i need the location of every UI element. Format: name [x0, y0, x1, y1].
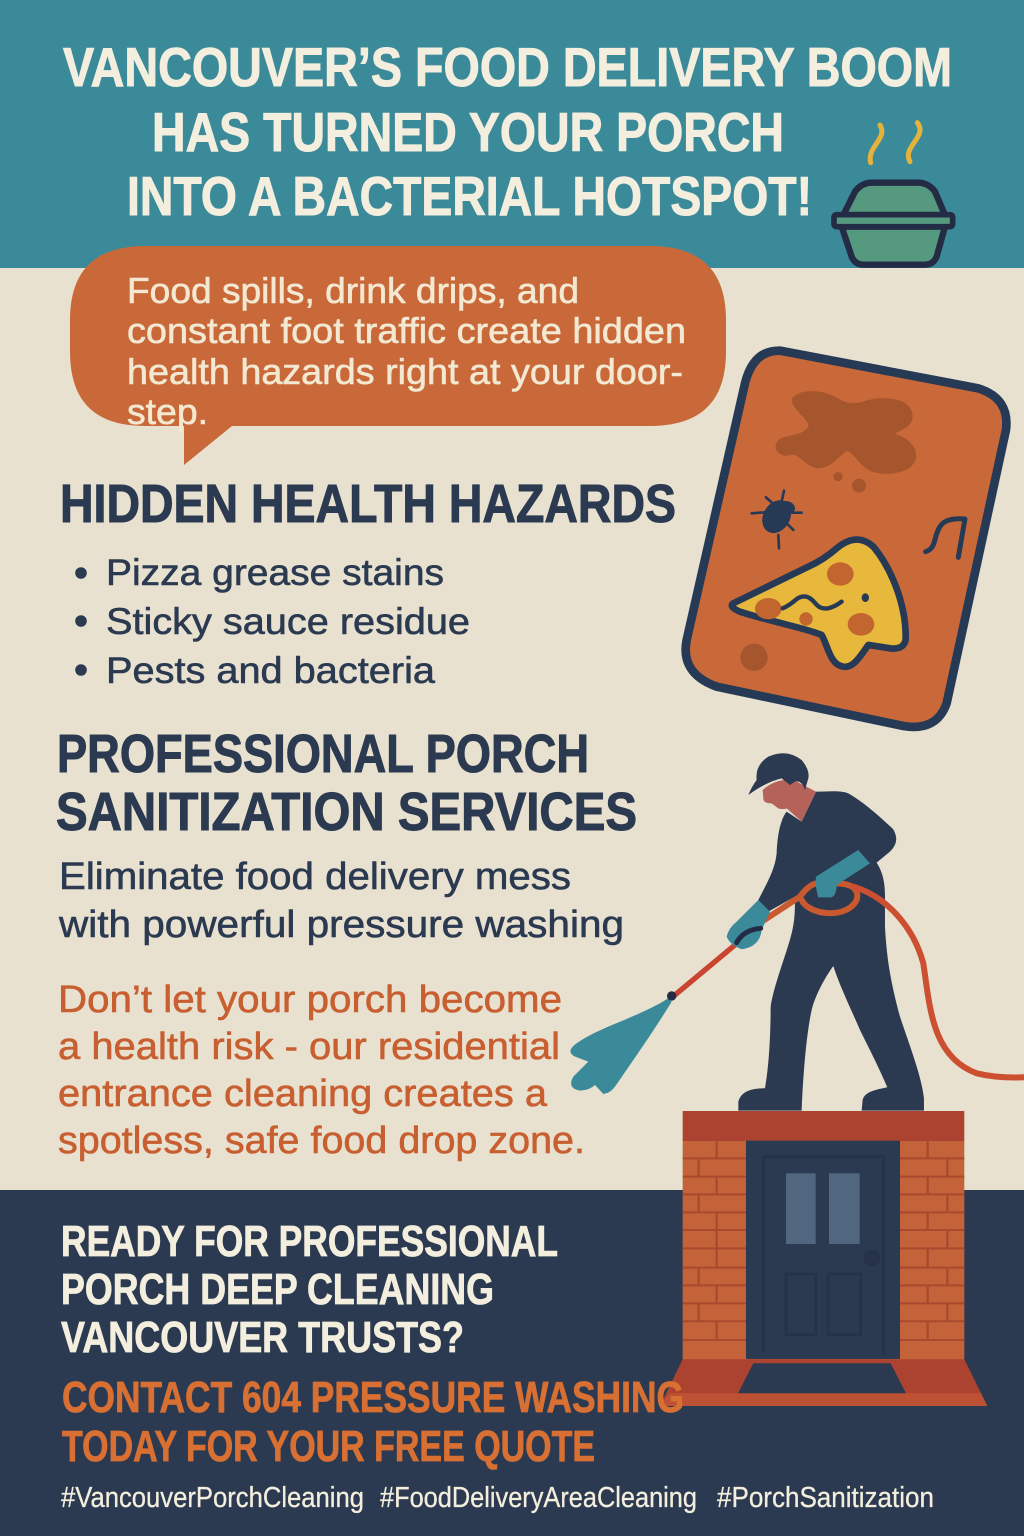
brick wall [683, 1140, 964, 1360]
speech bubble [70, 246, 726, 465]
wand grip and nozzle [737, 928, 761, 943]
call to action heading [61, 1217, 558, 1362]
hazards list: Pests and bacteria [106, 650, 435, 691]
mat [686, 351, 1006, 727]
call to action heading: VANCOUVER TRUSTS? [61, 1313, 464, 1362]
icon: takeout food box with steam [834, 123, 953, 265]
worker head [763, 780, 816, 822]
hashtags: #PorchSanitization [717, 1482, 934, 1514]
header band [0, 0, 1024, 268]
right glove [816, 850, 870, 897]
call to action heading: READY FOR PROFESSIONAL [61, 1217, 558, 1266]
bubble text [127, 270, 686, 432]
illustration: worker pressure washing [570, 753, 1024, 1111]
service description: Eliminate food delivery mess [59, 856, 571, 898]
floor lower band [660, 1393, 987, 1406]
grease stain [740, 393, 914, 671]
squiggle mark [926, 519, 965, 557]
illustration: brick porch with door [660, 1111, 987, 1406]
left glove [727, 900, 770, 949]
porch roof slab [683, 1111, 964, 1141]
pizza slice [732, 540, 906, 667]
heading: professional porch sanitization services: SANITIZATION SERVICES [56, 782, 637, 842]
water spray [570, 998, 672, 1094]
orange message [58, 979, 585, 1162]
orange message: spotless, safe food drop zone. [58, 1120, 585, 1162]
contact line: CONTACT 604 PRESSURE WASHING [62, 1373, 684, 1422]
title [63, 36, 952, 227]
call to action heading: PORCH DEEP CLEANING [61, 1265, 494, 1314]
service description: with powerful pressure washing [58, 904, 624, 946]
hashtags [61, 1482, 934, 1514]
illustration: dirty porch mat with pizza and bug [686, 351, 1006, 727]
heading: professional porch sanitization services: PROFESSIONAL PORCH [57, 724, 589, 784]
bubble text: health hazards right at your door- [127, 351, 683, 392]
title: HAS TURNED YOUR PORCH [152, 101, 784, 163]
door [746, 1141, 900, 1359]
hazards list: Sticky sauce residue [106, 601, 470, 642]
heading: professional porch sanitization services [56, 724, 637, 842]
contact line [62, 1373, 684, 1471]
title: INTO A BACTERIAL HOTSPOT! [127, 165, 812, 227]
bubble text: step. [127, 391, 208, 432]
bubble text: constant foot traffic create hidden [127, 310, 686, 351]
orange message: a health risk - our residential [58, 1026, 560, 1068]
orange message: Don’t let your porch become [58, 979, 562, 1021]
hose and wand [675, 883, 1024, 1077]
contact line: TODAY FOR YOUR FREE QUOTE [62, 1422, 595, 1471]
bubble text: Food spills, drink drips, and [127, 270, 579, 311]
hazards list [76, 552, 470, 691]
footer band [0, 1190, 1024, 1536]
hashtags: #VancouverPorchCleaning [61, 1482, 364, 1514]
hazards list: Pizza grease stains [106, 552, 444, 593]
service description [58, 856, 624, 946]
orange message: entrance cleaning creates a [58, 1073, 548, 1115]
bug [752, 491, 802, 548]
door mat [738, 1363, 906, 1393]
worker body [738, 791, 924, 1111]
hashtags: #FoodDeliveryAreaCleaning [380, 1482, 697, 1514]
heading: hidden health hazards: HIDDEN HEALTH HAZARDS [60, 474, 676, 534]
worker cap [748, 753, 809, 795]
porch floor [660, 1359, 987, 1406]
